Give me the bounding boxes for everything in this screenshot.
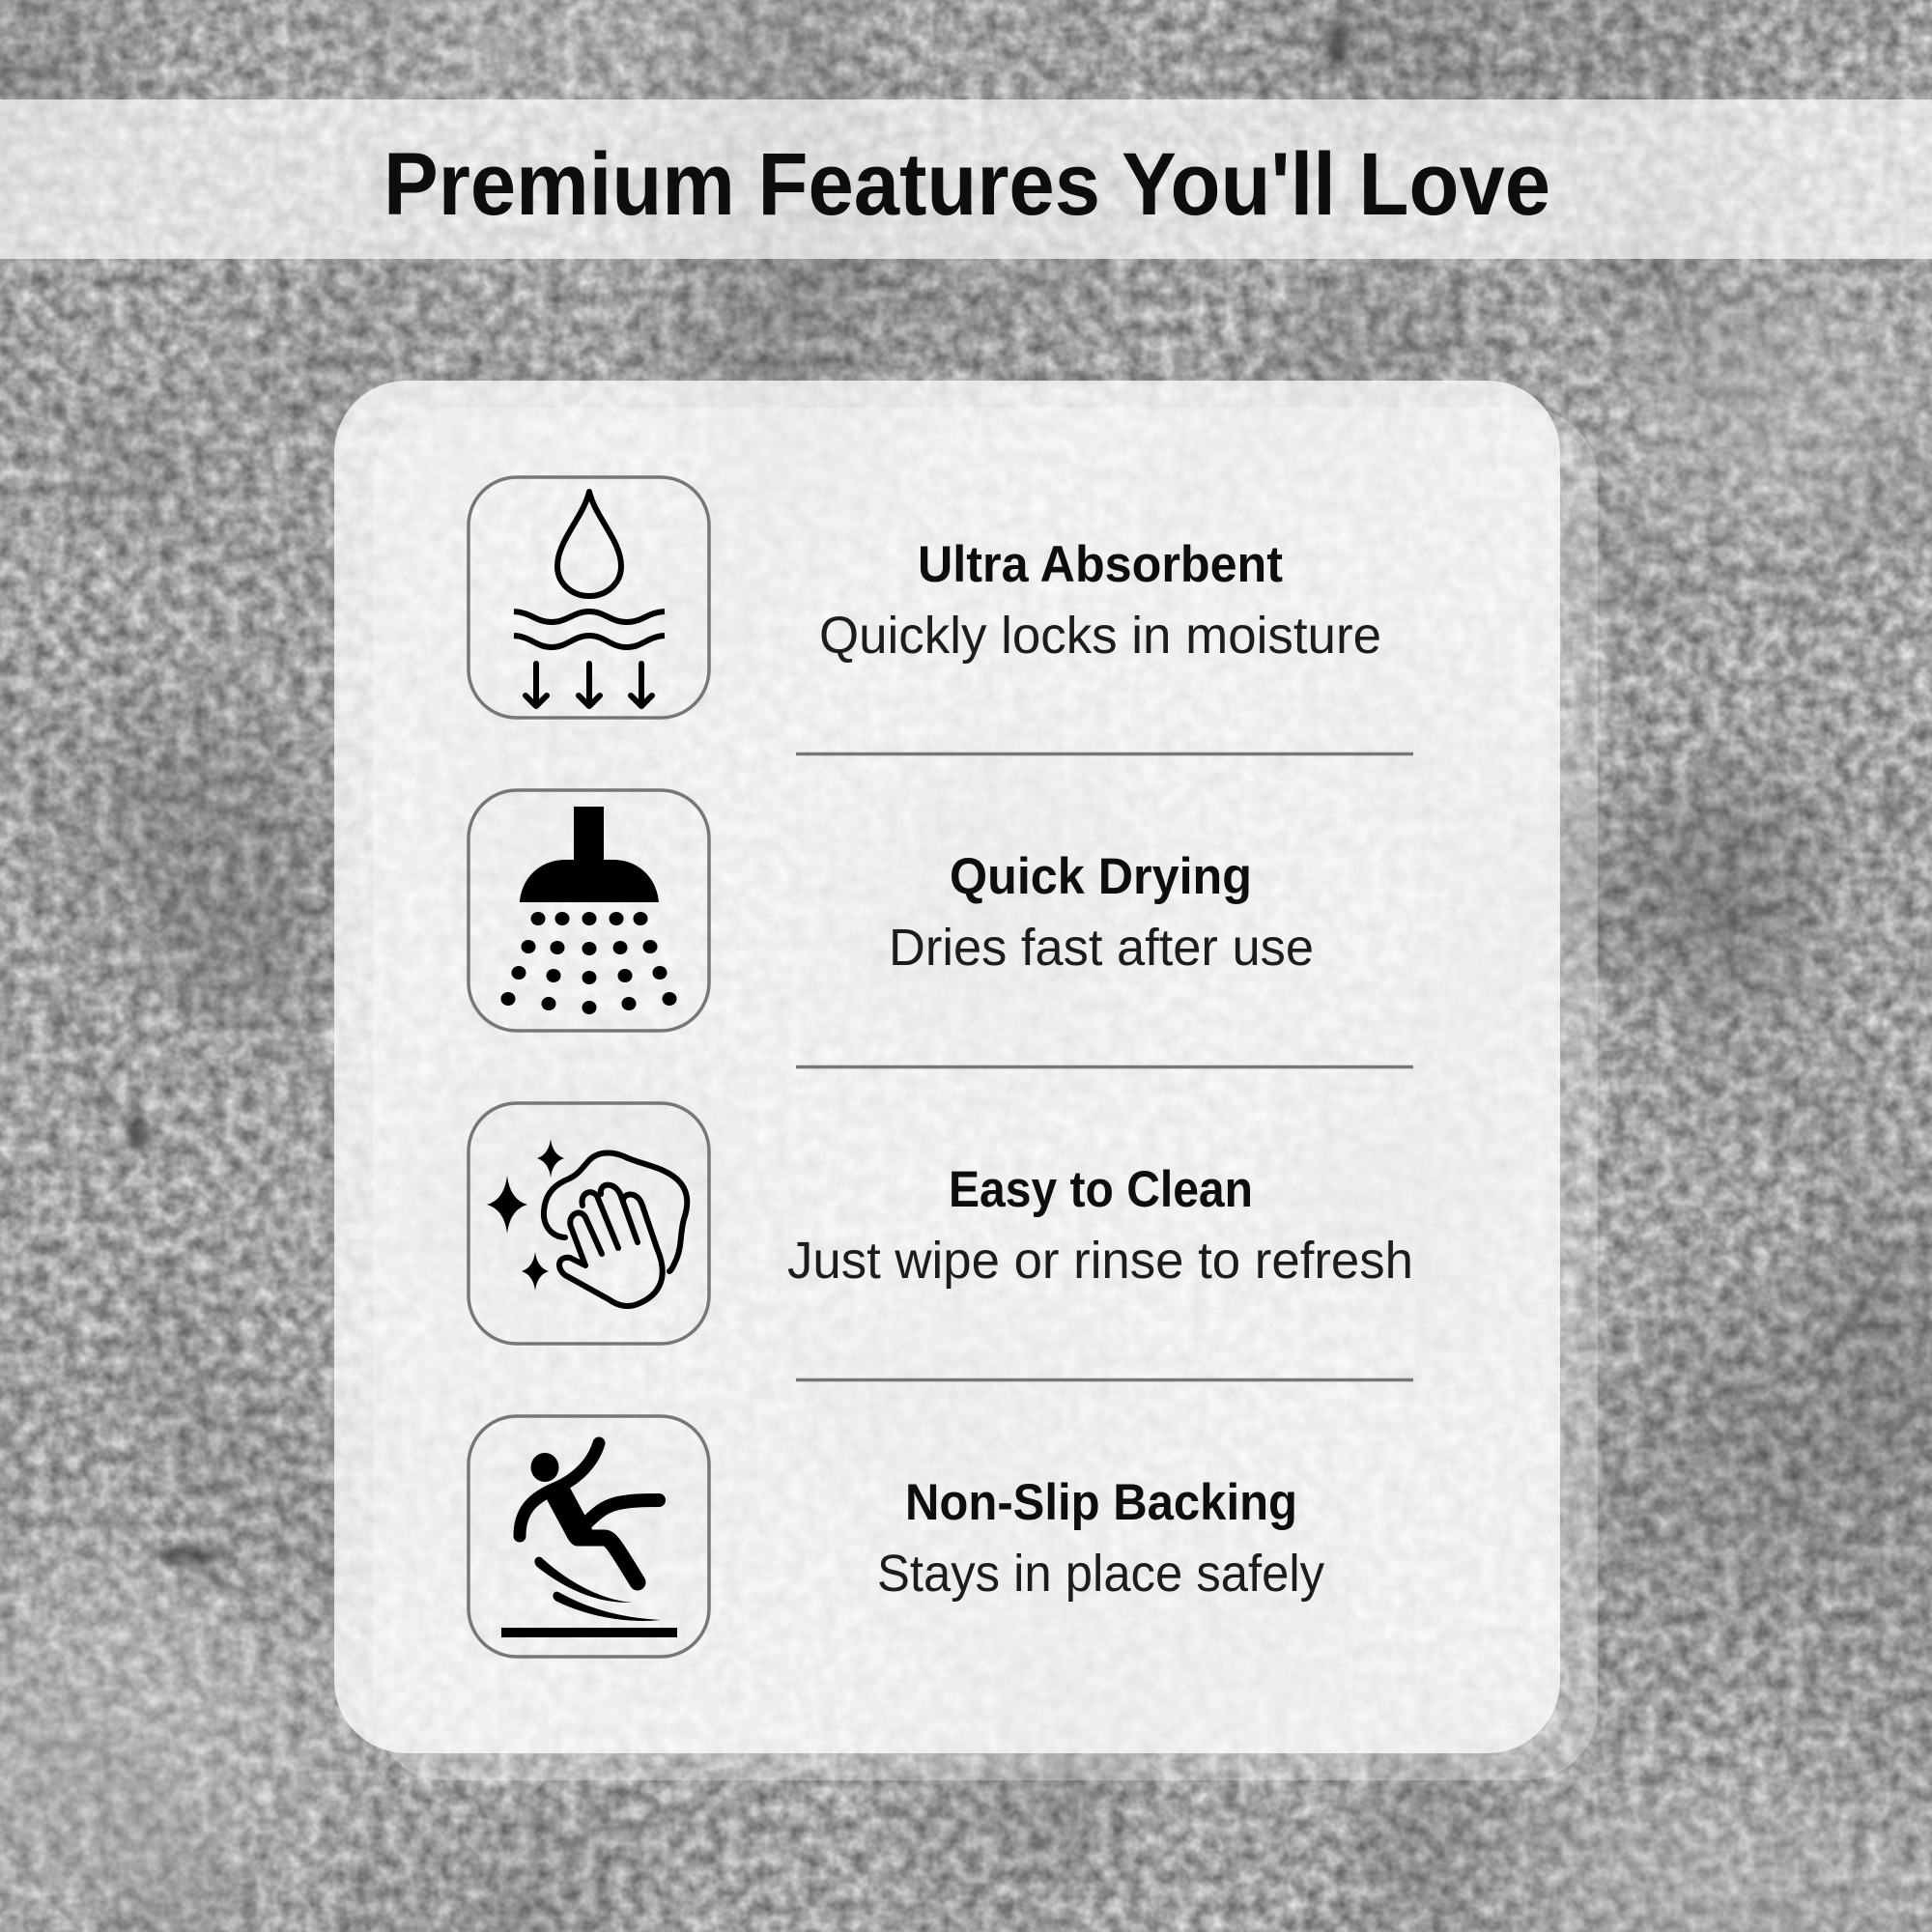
title band: [0, 99, 1932, 259]
feature: ultra absorbent: [469, 477, 1381, 718]
icon: water drop with absorption arrows: [469, 477, 709, 718]
panel: features card: [334, 381, 1598, 1780]
heading: Non-Slip Backing: [905, 1474, 1297, 1531]
feature: non-slip backing: [469, 1416, 1324, 1657]
description: Quickly locks in moisture: [819, 607, 1381, 665]
icon: shower head: [469, 790, 709, 1031]
panel front layer: [334, 381, 1560, 1753]
heading: Ultra Absorbent: [918, 536, 1283, 593]
description: Just wipe or rinse to refresh: [787, 1232, 1413, 1290]
description: Dries fast after use: [889, 919, 1314, 977]
feature: easy to clean: [469, 1103, 1413, 1344]
heading: Quick Drying: [950, 848, 1252, 905]
description: Stays in place safely: [877, 1545, 1324, 1603]
heading: Easy to Clean: [949, 1161, 1253, 1218]
feature: quick drying: [469, 790, 1314, 1031]
panel back layer: [373, 408, 1598, 1780]
icon: slipping figure: [469, 1416, 709, 1657]
icon: hand wiping with cloth and sparkles: [469, 1103, 709, 1344]
title: Premium Features You'll Love: [384, 135, 1550, 234]
